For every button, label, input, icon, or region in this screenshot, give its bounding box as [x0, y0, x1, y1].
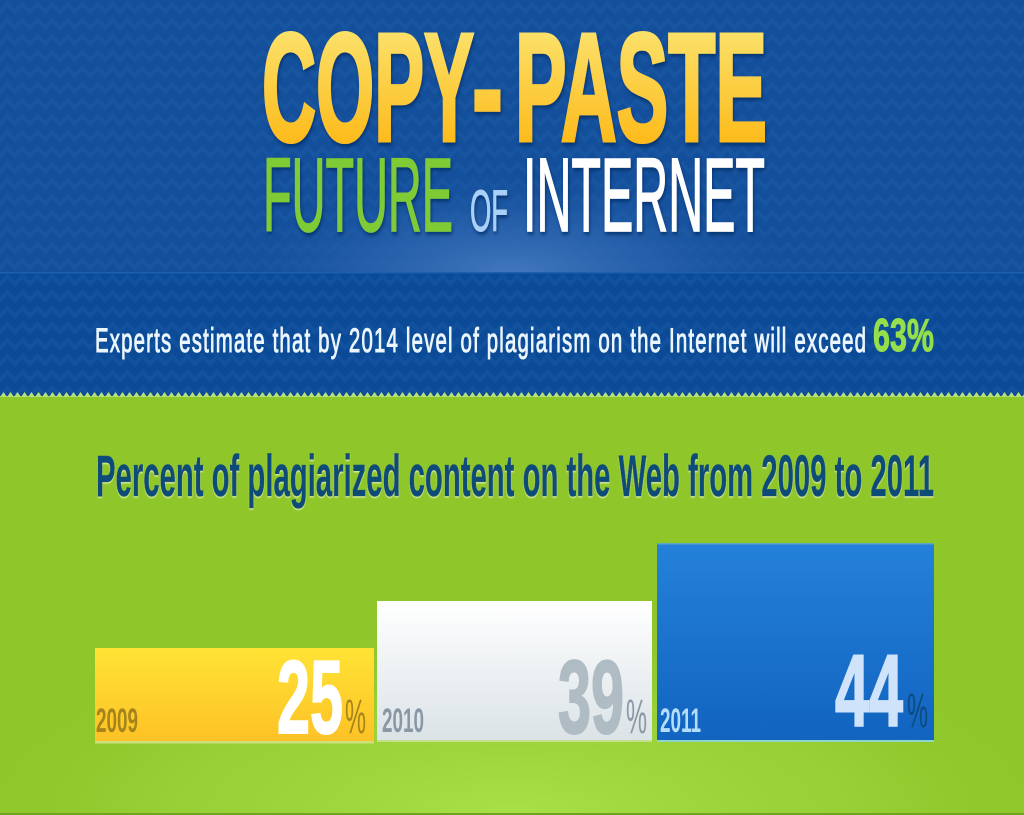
- panel: green chart background: [0, 391, 1024, 815]
- bar: 2009: [95, 640, 374, 756]
- title: copy-paste: COPY: [262, 2, 474, 174]
- year label: 2010: 2010: [382, 702, 424, 740]
- bar chart: [95, 543, 934, 756]
- year label: 2011: 2011: [660, 702, 701, 740]
- value: 39 percent: 39: [558, 640, 624, 756]
- year label: 2009: 2009: [96, 702, 138, 740]
- subtitle: future of internet: OF: [470, 179, 508, 244]
- panel: estimate band background: [0, 274, 1024, 394]
- bar: 2010: %: [626, 691, 647, 744]
- bar: 2009: %: [345, 691, 366, 744]
- text: plagiarism estimate: [95, 309, 934, 361]
- value: 25 percent: 25: [277, 640, 343, 756]
- subtitle: future of internet: FUTURE: [263, 137, 453, 254]
- bar: 2010: [377, 601, 652, 756]
- text: plagiarism estimate: Experts estimate that by 2014 level of plagiarism on the Internet will exceed: [95, 322, 866, 359]
- bar: 2011: %: [907, 685, 928, 738]
- panel: header background: [0, 0, 1024, 274]
- title: copy-paste: -: [472, 2, 503, 174]
- value: 44 percent: 44: [835, 634, 903, 748]
- callout: 63 percent: 63%: [873, 309, 934, 361]
- title: copy-paste: PASTE: [515, 2, 767, 174]
- bar: 2011: [657, 543, 934, 748]
